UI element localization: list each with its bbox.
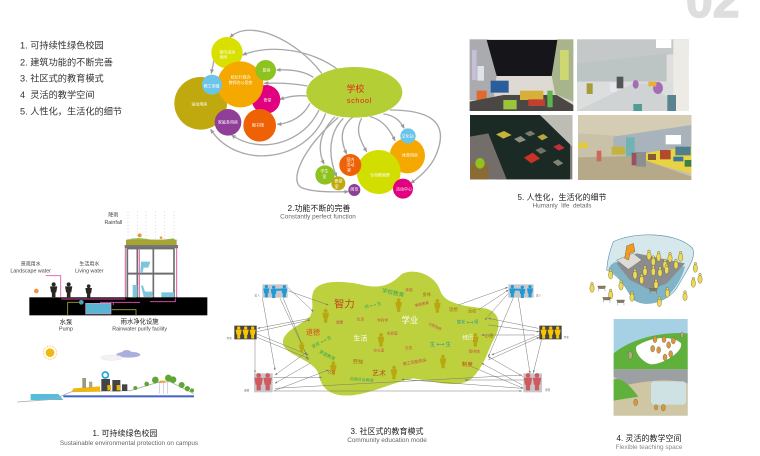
blob labels: 身体 [422,291,432,298]
network arrows [255,287,542,391]
caption: flexible teaching: Flexible teaching space [616,444,683,451]
left bubble cluster: 教师办公用房 [229,79,253,85]
blob labels: 情感教育 [414,300,430,308]
blob labels: 家庭教育 [318,348,337,363]
blob labels: 家校 ⟷ 生 [310,334,333,350]
panel: flexible teaching illustrations [590,235,702,416]
right bubble cluster: 食堂 [334,178,342,184]
blob labels: 健康 [336,319,344,324]
caption: community education: 3. 社区式的教育模式 [351,426,423,436]
left student group: 学生 [227,336,232,340]
ground slab with pipes and tank [29,297,207,316]
caption: flexible teaching [616,433,683,451]
right bubble cluster: 阅览 [350,185,358,191]
section labels: Pump [59,326,73,332]
right bubble cluster: 室 [322,173,326,179]
blob labels: 学校教育 [381,286,405,299]
building section [125,238,178,299]
section labels: Rainfall [104,220,122,226]
caption: function: Constantly perfect function [280,214,356,220]
blob labels: 经历 [462,334,474,342]
blob labels: 家长 ⟷ 师 [457,318,479,325]
blob labels: 道德 [306,328,320,337]
illustration: classroom bubble [590,235,702,307]
contents list [20,40,122,116]
bubble: school: 学校 [346,83,364,94]
section labels: 水泵 [60,317,73,326]
caption: community education: Community education mode [347,437,427,444]
left bubble cluster: 图书馆 [252,122,264,128]
panel: community education network [227,272,569,396]
panel: function bubble diagram [174,30,440,199]
right teacher group [523,373,551,392]
blob labels: 习惯培养 [427,321,443,332]
human figures and pipes [34,233,162,298]
section labels: Landscape water [10,269,51,275]
blob labels: 实验室 [387,330,398,335]
right bubble cluster: 体育用房 [402,151,418,157]
photo: stepped seating [470,115,572,179]
caption: humanity details: 5. 人性化，生活化的细节 [518,192,606,202]
photo: yellow corridor [578,115,691,180]
left teacher group: 老师 [244,389,250,393]
green blob [283,272,499,396]
photo: dark hall [470,39,573,111]
right parent group: 家人 [536,293,542,297]
caption: community education [347,426,427,444]
blob labels: 办公室 [374,347,385,352]
contents list: 3. 社区式的教育模式 [20,72,104,84]
caption: sustainable campus: 1. 可持续绿色校园 [93,428,157,438]
panel: humanity photos [470,39,691,180]
blob labels: 劳技 [353,358,364,366]
right bubble cluster: 活动中心 [396,185,412,191]
section labels: 景观用水 [21,260,41,267]
landscape ecology diagram [17,346,194,402]
left bubble cluster: 厨房 [263,67,271,73]
right bubble cluster: 专用教室群 [370,172,390,178]
right bubble cluster: 文化站 [402,133,414,139]
photo: bright interior [577,39,689,111]
right bubble cluster [315,128,425,199]
left parent group [255,284,288,298]
rainfall dots [128,212,174,240]
contents list: 5. 人性化，生活化的细节 [20,106,122,116]
right student group [539,326,569,340]
caption: flexible teaching: 4. 灵活的教学空间 [617,433,681,443]
left teacher group [244,373,273,393]
blob labels: 师 ⟷ 生 [364,300,383,311]
blob labels: 智力 [334,297,355,310]
caption: function: 2.功能不断的完善 [288,203,350,213]
left bubble cluster: 场所 [219,54,227,60]
section labels: 生活用水 [79,260,99,267]
section labels: Rainwater purify facility [112,326,167,332]
right bubble cluster: 室 [347,167,351,173]
contents list: 2. 建筑功能的不断完善 [20,56,113,68]
bubble: school [306,67,402,118]
blob labels [306,286,494,383]
blob labels: 学科学 [377,318,388,323]
left bubble cluster: 运动用房 [191,101,207,107]
left bubble cluster: 食堂 [263,97,271,103]
right student group: 学生 [564,336,569,340]
left bubble cluster [174,37,280,142]
left parent group: 家人 [255,293,260,297]
section labels: Living water [75,269,104,275]
blob labels: 生 ⟷ 生 [430,340,452,348]
right bubble cluster: 活动 [346,161,354,167]
icon: sun [43,346,57,359]
bubble connector arrows [211,30,440,192]
right bubble cluster: 室 [335,183,339,189]
left student group [227,326,257,340]
caption: humanity details: Humanly life details [533,202,591,210]
blob labels: 交流 [328,369,335,374]
illustration: outdoor teaching [614,319,688,416]
blob labels: 交流 [405,345,413,350]
blob labels: 思想 [449,306,458,312]
blob labels: 制度 [462,360,473,368]
blob labels: 自我社会教育 [350,375,374,383]
left bubble cluster: 教工用餐 [204,82,220,88]
blob labels: 教工后勤用房 [402,356,427,366]
blob labels: 艺术 [372,368,386,377]
section labels [10,212,167,332]
right teacher group: 老师 [545,388,551,392]
blob labels: 学业 [402,315,418,325]
section labels: 雨水净化设施 [121,316,159,325]
icon: clouds [101,350,140,360]
blob labels: 心理 [485,332,494,338]
bubble: school: school [347,96,372,105]
caption: sustainable campus: Sustainable environmental protection on campus [60,440,198,447]
left bubble cluster: 家庭多用房 [218,119,238,125]
caption: function [280,203,356,220]
contents list: 1. 可持续性绿色校园 [20,40,104,50]
blob labels: 生活 [353,333,367,342]
right bubble cluster: 室内 [346,156,354,162]
caption: sustainable campus [60,428,198,447]
blob labels: 体能 [405,287,413,292]
right parent group [508,284,542,298]
blob labels: 生活 [357,317,364,322]
blob labels: 活动 [468,308,477,315]
left bubble cluster: 室内活动 [219,48,235,54]
section labels: 降雨 [108,212,118,219]
right bubble cluster: 学生 [320,168,328,174]
caption: humanity details [518,192,606,210]
figures inside blob [299,298,479,379]
blob labels: 图书馆 [469,349,480,354]
panel: rainwater section diagram [10,212,207,402]
left bubble cluster: 校长行政办 [231,74,251,80]
contents list: 4 灵活的教学空间 [20,89,95,100]
